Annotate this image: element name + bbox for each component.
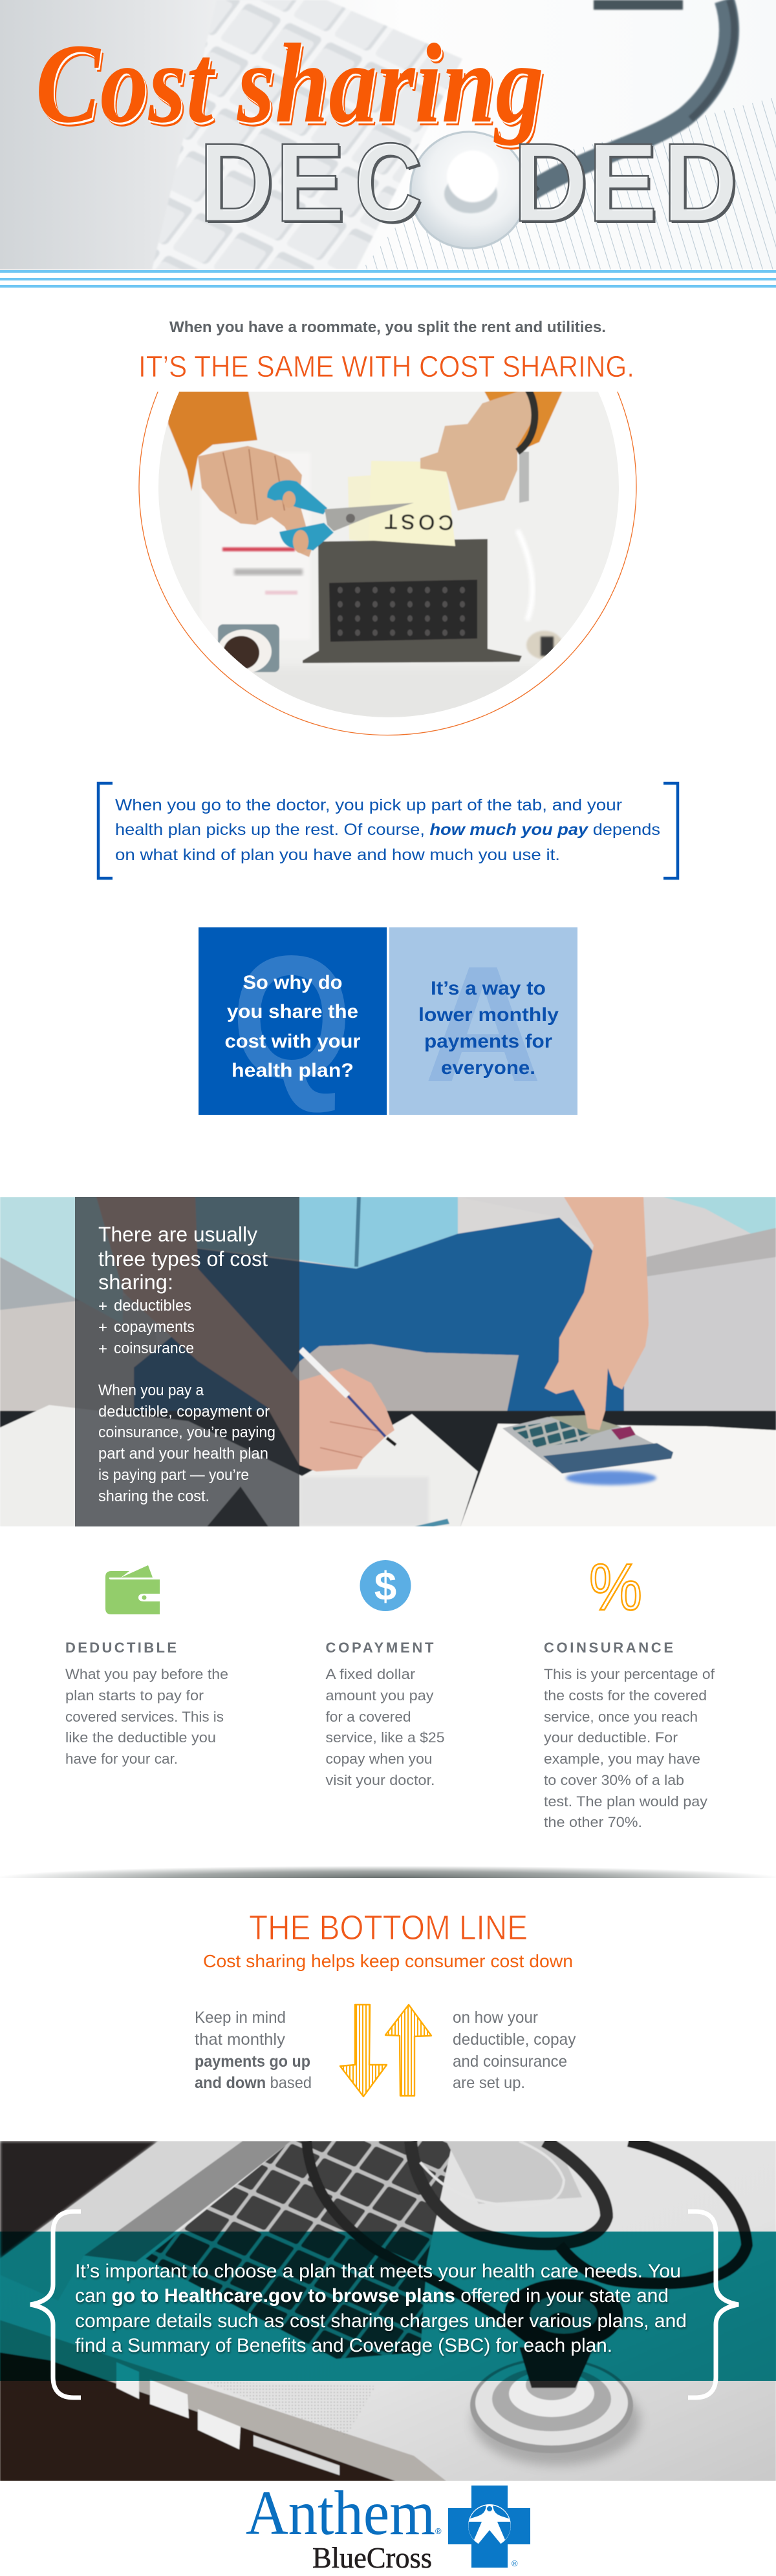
panel: answer: payments for <box>424 1031 552 1052</box>
body text <box>544 1666 715 1830</box>
header banner <box>0 0 776 269</box>
body text: covered services. This is <box>65 1709 224 1725</box>
note: COST: COST <box>385 510 453 534</box>
panel: types of cost sharing: coinsurance <box>114 1340 194 1357</box>
body text <box>65 1666 228 1767</box>
panel: types of cost sharing: There are usually <box>98 1223 257 1246</box>
callout: bracketed paragraph <box>98 783 678 878</box>
panel: types of cost sharing: sharing the cost. <box>98 1488 210 1505</box>
scissors <box>267 480 414 553</box>
title: DECODED <box>205 142 736 224</box>
header photo: calculator keys <box>152 0 462 269</box>
watermark Q: Q <box>232 919 352 1115</box>
body text: like the deductible you <box>65 1729 216 1746</box>
panel: types of cost sharing <box>75 1197 299 1526</box>
panel: question: cost with your <box>225 1031 361 1052</box>
text: right of arrows <box>453 2009 576 2092</box>
text: left of arrows <box>195 2009 312 2092</box>
callout: choose a plan: It’s important to choose a plan that meets your health care needs. You <box>75 2261 681 2282</box>
text: left of arrows: Keep in mind <box>195 2009 286 2027</box>
panel: answer: everyone. <box>441 1057 535 1079</box>
heading: COPAYMENT <box>326 1640 434 1656</box>
panel: types of cost sharing: copayments <box>114 1318 195 1336</box>
title: DECODED: DED <box>513 121 738 245</box>
body text: visit your doctor. <box>326 1772 435 1788</box>
section shadow <box>10 1866 767 1878</box>
body text: plan starts to pay for <box>65 1687 204 1704</box>
text: left of arrows: and down based <box>195 2074 312 2092</box>
callout: bracketed paragraph: health plan picks up the rest. Of course, how much you pay depends <box>115 821 660 839</box>
body text: service, like a $25 <box>326 1729 445 1746</box>
wordmark: Anthem: Anthem <box>246 2478 435 2548</box>
body text: copay when you <box>326 1751 432 1767</box>
body text: for a covered <box>326 1709 411 1725</box>
wordmark: BlueCross: BlueCross <box>312 2541 432 2574</box>
title: DECODED: C <box>354 120 422 245</box>
bracket: right brace <box>688 2212 738 2398</box>
icon: percent: % <box>589 1550 642 1624</box>
callout: choose a plan: find a Summary of Benefits and Coverage (SBC) for each plan. <box>75 2335 612 2356</box>
title: Cost sharing: Cost sharing <box>38 25 546 151</box>
body text: the other 70%. <box>544 1814 642 1830</box>
body text <box>326 1666 445 1788</box>
callout: bracketed paragraph: on what kind of plan you have and how much you use it. <box>115 846 560 864</box>
title: DECODED: C <box>356 121 424 247</box>
table <box>0 1411 776 1526</box>
photo: man with calculator and papers <box>0 1197 776 1526</box>
left arm and writing hand <box>96 1197 394 1472</box>
icon: dollar <box>360 1560 411 1611</box>
heading: COINSURANCE <box>544 1640 673 1656</box>
intro line: When you have a roommate, you split the rent and utilities. <box>169 319 606 336</box>
column: coinsurance <box>544 1550 715 1830</box>
icon: dollar: $ <box>374 1565 396 1609</box>
panel: types of cost sharing: + <box>98 1298 107 1315</box>
registered mark: ® <box>512 2559 518 2568</box>
icon: blue cross <box>448 2486 530 2568</box>
panel: types of cost sharing: is paying part — you’re <box>98 1466 249 1484</box>
title: DECODED: DE <box>199 121 345 245</box>
body text: your deductible. For <box>544 1729 678 1746</box>
callout: bracketed paragraph: When you go to the doctor, you pick up part of the tab, and your <box>115 796 622 814</box>
header photo: stethoscope <box>409 0 735 249</box>
panel: question: you share the <box>227 1001 358 1022</box>
panel: answer: It’s a way to <box>431 978 546 999</box>
body text: A fixed dollar <box>326 1666 415 1682</box>
body text: This is your percentage of <box>544 1666 715 1682</box>
panel: question <box>199 919 387 1115</box>
panel: answer: lower monthly <box>418 1004 559 1026</box>
text: right of arrows: deductible, copay <box>453 2031 576 2049</box>
body text: to cover 30% of a lab <box>544 1772 684 1788</box>
panel: types of cost sharing: three types of cost <box>98 1247 268 1271</box>
panel: question: So why do <box>243 972 343 993</box>
orange ring <box>138 392 637 735</box>
column: copayment <box>326 1560 445 1788</box>
bracket: left brace <box>30 2212 81 2398</box>
body text: amount you pay <box>326 1687 433 1704</box>
panel: types of cost sharing: coinsurance, you’re paying <box>98 1424 275 1441</box>
panel: types of cost sharing: sharing: <box>98 1271 173 1294</box>
body text: service, once you reach <box>544 1709 698 1725</box>
panel: types of cost sharing: part and your health plan <box>98 1445 268 1462</box>
photo <box>155 388 627 724</box>
header photo: ruled paper <box>362 97 776 269</box>
panel: types of cost sharing: + <box>98 1340 107 1358</box>
icon: down and up arrows <box>340 2005 431 2096</box>
body text: have for your car. <box>65 1751 178 1767</box>
panel: types of cost sharing: deductible, copayment or <box>98 1403 270 1420</box>
heading: the bottom line: THE BOTTOM LINE <box>249 1908 528 1947</box>
body text: the costs for the covered <box>544 1687 707 1704</box>
photo: stethoscope on laptop <box>0 2141 776 2481</box>
circular photo: scissors cutting cost note <box>138 392 637 735</box>
text: left of arrows: that monthly <box>195 2031 286 2049</box>
body text: test. The plan would pay <box>544 1793 707 1810</box>
right arm and pointing hand <box>544 1197 649 1430</box>
heading: same with cost sharing: IT’S THE SAME WITH COST SHARING. <box>138 350 634 383</box>
callout: choose a plan: compare details such as cost sharing charges under various plans, and <box>75 2310 687 2332</box>
text: right of arrows: and coinsurance <box>453 2053 567 2071</box>
body text: What you pay before the <box>65 1666 228 1682</box>
header stripes <box>0 270 776 288</box>
callout: choose a plan <box>75 2261 687 2356</box>
calculator <box>502 1415 673 1473</box>
icon: wallet <box>105 1565 160 1614</box>
panel: answer <box>389 927 577 1117</box>
watermark A: A <box>424 932 542 1117</box>
pen <box>301 1349 396 1445</box>
logo: Anthem Blue Cross <box>246 2478 530 2574</box>
title: DECODED: DED <box>515 123 740 247</box>
title: Cost sharing: Cost sharing <box>37 23 545 149</box>
column: deductible <box>65 1565 228 1767</box>
subheading: Cost sharing helps keep consumer cost down <box>203 1951 573 1971</box>
panel: question: health plan? <box>232 1060 354 1081</box>
panel: types of cost sharing: When you pay a <box>98 1382 204 1399</box>
text: right of arrows: on how your <box>453 2009 538 2027</box>
panel: types of cost sharing: + <box>98 1319 107 1336</box>
body text: example, you may have <box>544 1751 700 1767</box>
title: DECODED: DE <box>201 123 347 247</box>
text: right of arrows: are set up. <box>453 2074 525 2092</box>
panel: types of cost sharing: deductibles <box>114 1297 191 1314</box>
title: Cost sharing: Cost sharing <box>36 21 544 147</box>
text: left of arrows: payments go up <box>195 2053 310 2071</box>
registered mark: ® <box>435 2526 442 2536</box>
teal band <box>0 2232 776 2381</box>
callout: choose a plan: can go to Healthcare.gov to browse plans offered in your state and <box>75 2285 669 2307</box>
heading: DEDUCTIBLE <box>65 1640 177 1656</box>
